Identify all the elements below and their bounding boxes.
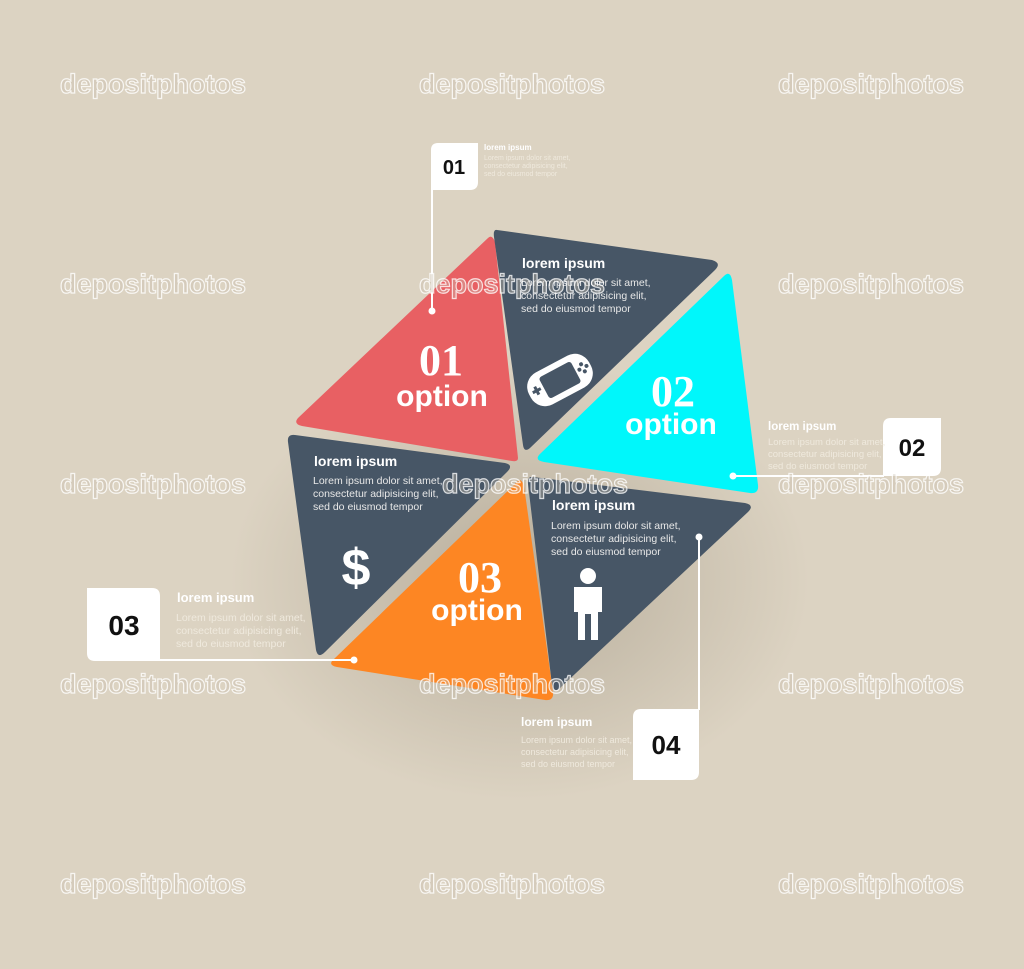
label 03 option <box>431 553 523 627</box>
segment: dark right with person: Lorem ipsum dolor sit amet, <box>551 520 681 532</box>
icon: person <box>574 568 602 640</box>
callout 04 <box>521 534 702 780</box>
segment: dark left with dollar: sed do eiusmod tempor <box>313 501 423 513</box>
text block: sed do eiusmod tempor <box>521 303 631 315</box>
segment: 01 red <box>296 237 518 461</box>
callout 01 <box>428 143 570 314</box>
segment: dark left with dollar: lorem ipsum <box>314 453 397 469</box>
callout 03: sed do eiusmod tempor <box>176 638 286 650</box>
callout 02: 02 <box>899 435 925 462</box>
segment: 03 orange <box>331 480 553 700</box>
callout 04: 04 <box>652 730 681 760</box>
text block <box>521 255 651 315</box>
segment: dark left with dollar: Lorem ipsum dolor sit amet, <box>313 475 443 487</box>
watermarks: depositphotos <box>778 869 964 899</box>
segment: 02 cyan <box>538 274 758 493</box>
callout 01: 01 <box>443 157 465 179</box>
watermarks: depositphotos <box>419 869 605 899</box>
segment: dark right with person: sed do eiusmod tempor <box>551 546 661 558</box>
watermarks: depositphotos <box>419 269 605 299</box>
callout 03: Lorem ipsum dolor sit amet, <box>176 612 306 624</box>
callout 01: Lorem ipsum dolor sit amet, <box>484 155 570 162</box>
text block: lorem ipsum <box>522 255 605 271</box>
callout 01: sed do eiusmod tempor <box>484 171 558 178</box>
watermarks: depositphotos <box>60 469 246 499</box>
callout 02: lorem ipsum <box>768 421 836 433</box>
label 01 option: option <box>396 380 488 413</box>
label 03 option: 03 <box>458 553 502 602</box>
text block: Lorem ipsum dolor sit amet, <box>521 277 651 289</box>
watermarks: depositphotos <box>60 269 246 299</box>
label 01 option <box>396 336 488 413</box>
watermarks <box>60 69 964 899</box>
callout 02: consectetur adipisicing elit, <box>768 449 882 460</box>
callout 03: 03 <box>108 610 140 641</box>
label 03 option: option <box>431 594 523 627</box>
label 02 option: 02 <box>651 367 695 416</box>
segment: dark left with dollar <box>288 435 510 655</box>
callout 04: sed do eiusmod tempor <box>521 759 615 769</box>
watermarks: depositphotos <box>778 69 964 99</box>
callout 01: lorem ipsum <box>484 143 532 152</box>
callout 04: lorem ipsum <box>521 715 592 729</box>
label 02 option <box>625 367 717 441</box>
callout 04: consectetur adipisicing elit, <box>521 747 629 757</box>
watermarks: depositphotos <box>778 269 964 299</box>
watermarks: depositphotos <box>419 69 605 99</box>
callout 03: consectetur adipisicing elit, <box>176 625 301 637</box>
watermarks: depositphotos <box>419 669 605 699</box>
watermarks: depositphotos <box>60 869 246 899</box>
callout 03 <box>87 588 358 664</box>
callout 02: sed do eiusmod tempor <box>768 461 867 472</box>
segment: dark right with person: consectetur adipisicing elit, <box>551 533 676 545</box>
callout 03: lorem ipsum <box>177 590 254 605</box>
segment: dark left with dollar: consectetur adipisicing elit, <box>313 488 438 500</box>
segment: dark right with person <box>528 477 751 690</box>
watermarks: depositphotos <box>778 669 964 699</box>
segment: dark top with gamepad <box>494 230 718 450</box>
watermarks: depositphotos <box>60 69 246 99</box>
callout 04: Lorem ipsum dolor sit amet, <box>521 735 632 745</box>
callout 02 <box>730 418 941 480</box>
callout 02: Lorem ipsum dolor sit amet, <box>768 437 885 448</box>
watermarks: depositphotos <box>60 669 246 699</box>
watermarks: depositphotos <box>778 469 964 499</box>
callout 01: consectetur adipisicing elit, <box>484 163 568 170</box>
text block: consectetur adipisicing elit, <box>521 290 646 302</box>
label 01 option: 01 <box>419 336 463 385</box>
watermarks: depositphotos <box>442 469 628 499</box>
icon: dollar: $ <box>342 539 371 597</box>
segment: dark right with person: lorem ipsum <box>552 497 635 513</box>
icon: gamepad <box>522 348 598 412</box>
label 02 option: option <box>625 408 717 441</box>
